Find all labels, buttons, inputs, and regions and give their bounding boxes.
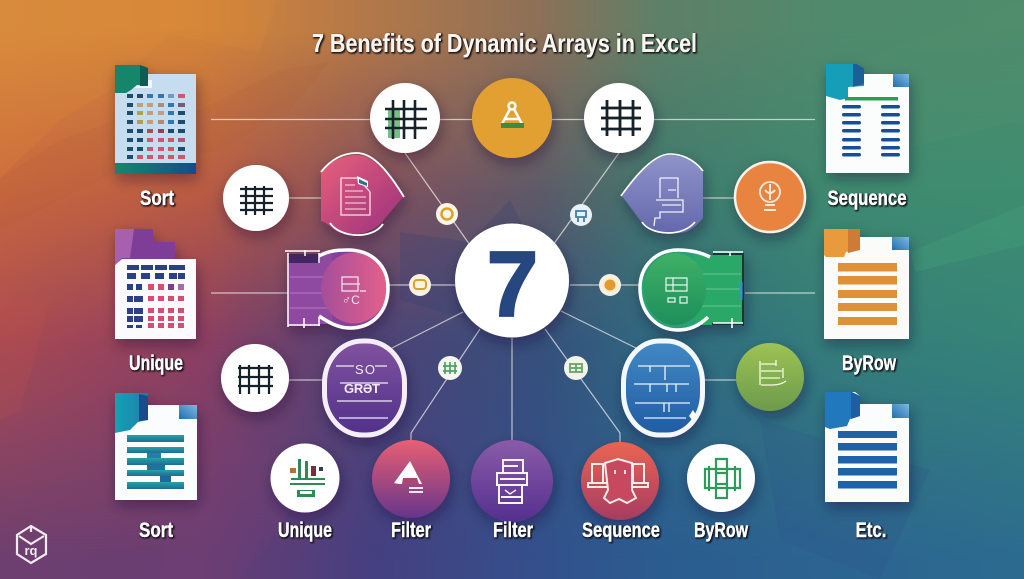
document icon: sort spreadsheet (115, 65, 196, 174)
label: ByRow: ByRow (694, 519, 748, 542)
node: filter circle (372, 440, 450, 518)
panel: middle right green document (640, 250, 743, 330)
logo: hexagon cube (17, 526, 46, 563)
node: unique chart circle (270, 444, 340, 512)
logo: hexagon cube: rq (24, 543, 38, 558)
label: Etc.: Etc. (856, 519, 886, 542)
label: Sequence: Sequence (582, 519, 660, 542)
label: Filter: Filter (493, 519, 533, 542)
central circle with number 7 (455, 224, 569, 338)
document icon: unique spreadsheet (115, 229, 196, 339)
node: top right grid (584, 83, 654, 153)
label: Sequence: Sequence (828, 187, 906, 210)
node: top gold circle (472, 78, 552, 158)
node: left upper grid (223, 165, 289, 231)
node: sequence circle (581, 442, 659, 520)
title: 7 Benefits of Dynamic Arrays in Excel (312, 28, 697, 58)
panel: purple text card: GRƏT (344, 381, 380, 396)
central circle with number 7: 7 (487, 232, 538, 336)
panel: purple text card (324, 341, 404, 435)
document icon: etc (825, 392, 909, 502)
small badge: middle left (409, 274, 431, 296)
node: byrow circle (687, 444, 755, 512)
label: Unique: Unique (278, 519, 332, 542)
label: Filter: Filter (391, 519, 431, 542)
small badge: lower right (564, 356, 588, 380)
label: Sort: Sort (139, 519, 173, 542)
label: Unique: Unique (129, 352, 183, 375)
small badge: lower left (438, 356, 462, 380)
panel: periwinkle document shield (621, 154, 703, 234)
node: filter document circle (471, 440, 553, 522)
document icon: sequence (826, 64, 909, 173)
document icon: byrow (824, 229, 909, 339)
small badge: upper left (436, 203, 458, 225)
node: orange bulb (735, 162, 805, 232)
panel: pink document shield (321, 153, 404, 235)
node: top left grid (370, 83, 440, 153)
small badge: middle right (599, 274, 621, 296)
panel: purple text card: SO (355, 362, 375, 377)
panel: blue text card (624, 341, 702, 435)
node: left lower grid (221, 344, 289, 412)
panel: middle left striped document (285, 250, 388, 328)
small badge: upper right (570, 204, 592, 226)
label: Sort: Sort (140, 187, 174, 210)
label: ByRow: ByRow (842, 352, 896, 375)
panel: middle left striped document: ♂C (342, 293, 360, 307)
node: green list circle (736, 343, 804, 411)
document icon: sort list (115, 393, 197, 500)
connector lines (211, 120, 815, 444)
